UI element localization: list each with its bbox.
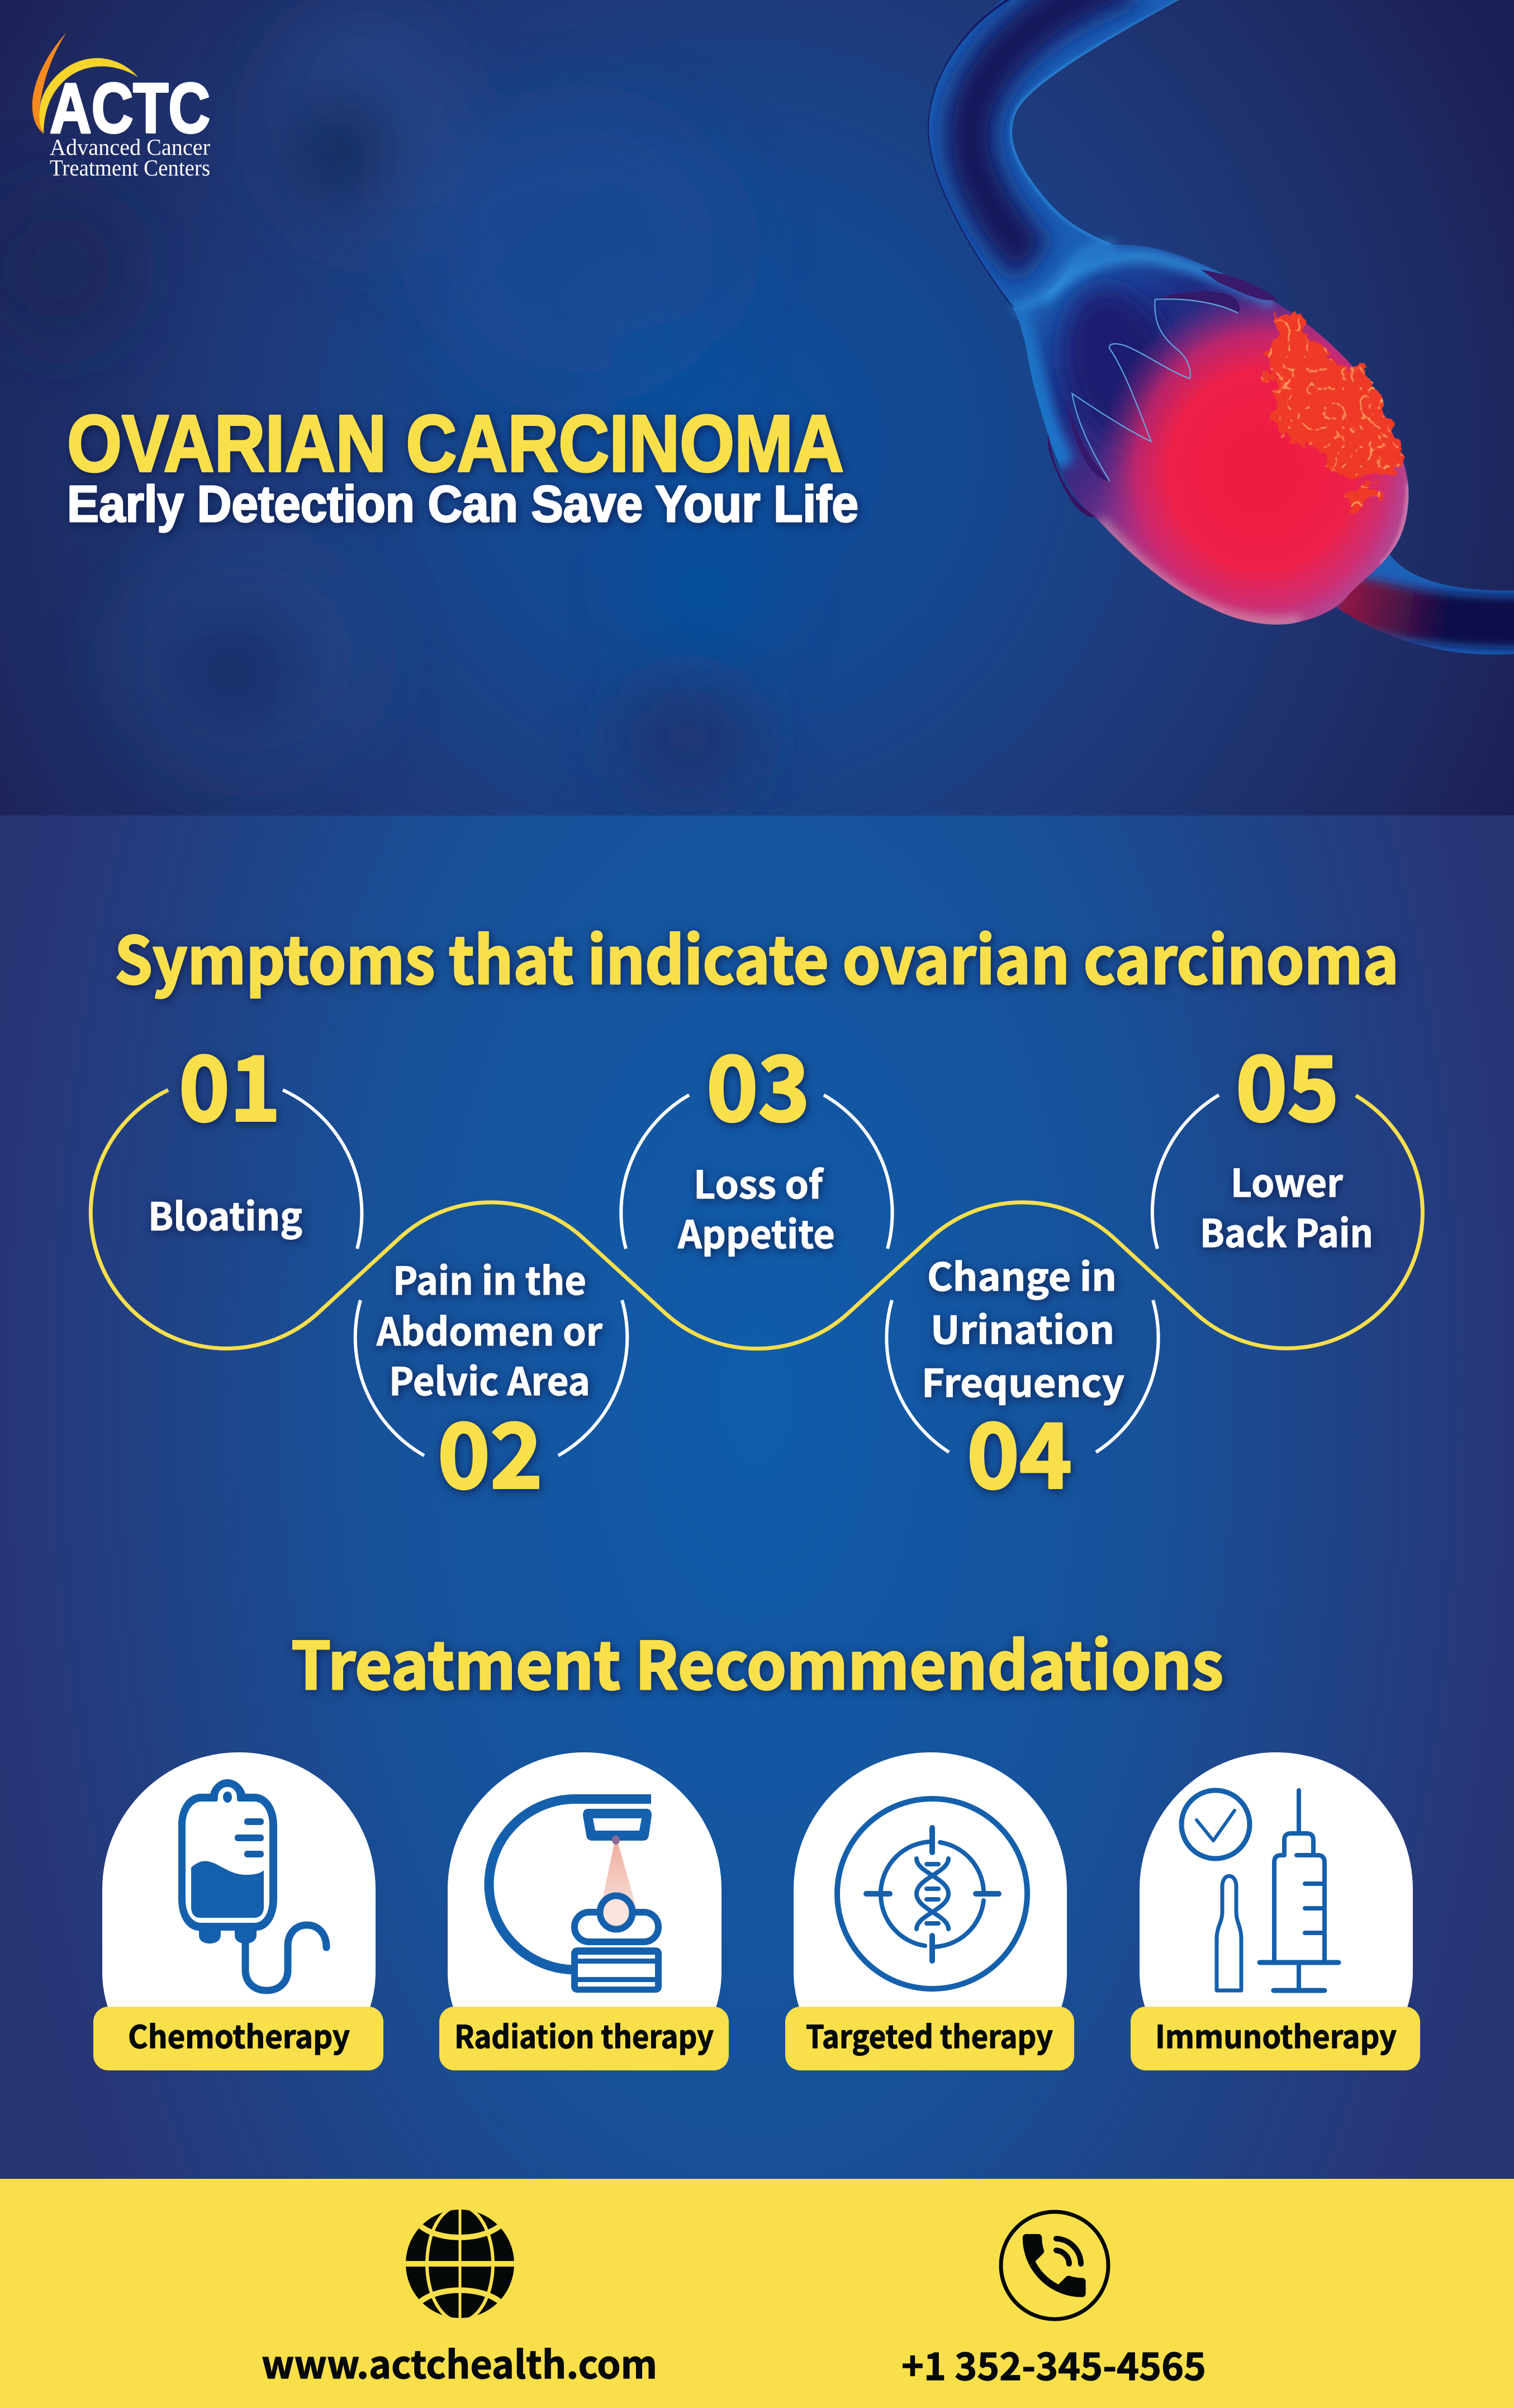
logo swoosh yellow bbox=[39, 58, 138, 134]
logo swoosh orange bbox=[32, 32, 67, 133]
logo wordmark: ACTC bbox=[50, 69, 210, 148]
label pill bbox=[93, 2007, 383, 2070]
phone number: +1 352-345-4565 bbox=[901, 2336, 1206, 2391]
tube and ovary junction highlight bbox=[1013, 246, 1116, 309]
step labels: Loss of bbox=[694, 1154, 824, 1210]
label: Targeted therapy bbox=[806, 2012, 1053, 2058]
icon: syringe, vial and check bbox=[1181, 1790, 1339, 1990]
heading: treatment: Treatment Recommendations bbox=[291, 1613, 1223, 1708]
panel: targeted therapy card bbox=[785, 1752, 1074, 2070]
label: Immunotherapy bbox=[1155, 2012, 1397, 2058]
logo tagline: Treatment Centers bbox=[50, 155, 210, 181]
fimbriae folds bbox=[1048, 269, 1278, 517]
step labels: Urination bbox=[931, 1300, 1114, 1355]
card arch bbox=[102, 1752, 376, 2012]
card arch bbox=[1140, 1752, 1413, 2012]
label pill bbox=[785, 2007, 1074, 2070]
ovary body bbox=[1013, 245, 1408, 625]
step numbers: 03 bbox=[706, 1017, 810, 1147]
hero background bbox=[0, 0, 1514, 816]
logo tagline: Advanced Cancer bbox=[50, 134, 210, 160]
label pill bbox=[439, 2007, 729, 2070]
white circle arcs bbox=[283, 1090, 1219, 1456]
subtitle: Early Detection Can Save Your Life bbox=[67, 476, 858, 533]
panel: contact footer bbox=[0, 2179, 1514, 2408]
ovary illustration with tumor bbox=[894, 0, 1514, 663]
label pill bbox=[1131, 2007, 1420, 2070]
step labels: Pain in the bbox=[393, 1250, 586, 1306]
panel: immunotherapy card bbox=[1131, 1752, 1420, 2070]
icon: radiation machine bbox=[489, 1799, 662, 1993]
step numbers: 02 bbox=[438, 1385, 543, 1514]
icon: globe bbox=[402, 2206, 520, 2321]
step labels: Pelvic Area bbox=[389, 1351, 590, 1406]
yellow wave line bbox=[91, 1090, 1422, 1349]
label: Chemotherapy bbox=[128, 2012, 350, 2058]
step numbers: 04 bbox=[967, 1385, 1072, 1514]
icon: IV bag bbox=[178, 1779, 277, 1944]
step labels: Back Pain bbox=[1200, 1203, 1373, 1258]
icon: DNA target bbox=[837, 1799, 1027, 1989]
tumor mass bbox=[1261, 314, 1400, 515]
step labels: Abdomen or bbox=[376, 1301, 602, 1357]
logo bbox=[32, 32, 210, 181]
card arch bbox=[794, 1752, 1067, 2012]
panel: radiation therapy card bbox=[439, 1752, 729, 2070]
panel: chemotherapy card bbox=[93, 1752, 383, 2070]
step labels: Frequency bbox=[922, 1353, 1124, 1408]
hero title bbox=[67, 399, 858, 533]
fallopian tube lower bbox=[1336, 554, 1514, 655]
footer background bbox=[0, 2179, 1514, 2408]
step labels: Lower bbox=[1231, 1153, 1343, 1208]
main title: OVARIAN CARCINOMA bbox=[67, 399, 844, 489]
step numbers: 05 bbox=[1236, 1017, 1339, 1147]
panel: symptoms and treatments background bbox=[0, 816, 1514, 2179]
step labels: Change in bbox=[927, 1246, 1117, 1302]
symptoms wave diagram bbox=[91, 1017, 1422, 1514]
icon: phone bbox=[1001, 2212, 1108, 2319]
step labels: Appetite bbox=[677, 1204, 835, 1259]
step labels: Bloating bbox=[148, 1186, 302, 1241]
step numbers: 01 bbox=[179, 1017, 281, 1147]
hero panel bbox=[0, 0, 1514, 816]
label: Radiation therapy bbox=[454, 2012, 714, 2058]
fallopian tube upper bbox=[928, 0, 1179, 308]
card arch bbox=[448, 1752, 722, 2012]
heading: symptoms: Symptoms that indicate ovarian carcinoma bbox=[115, 909, 1399, 1003]
website: www.actchealth.com bbox=[262, 2334, 657, 2390]
step labels bbox=[148, 1153, 1373, 1408]
step numbers bbox=[179, 1017, 1339, 1514]
